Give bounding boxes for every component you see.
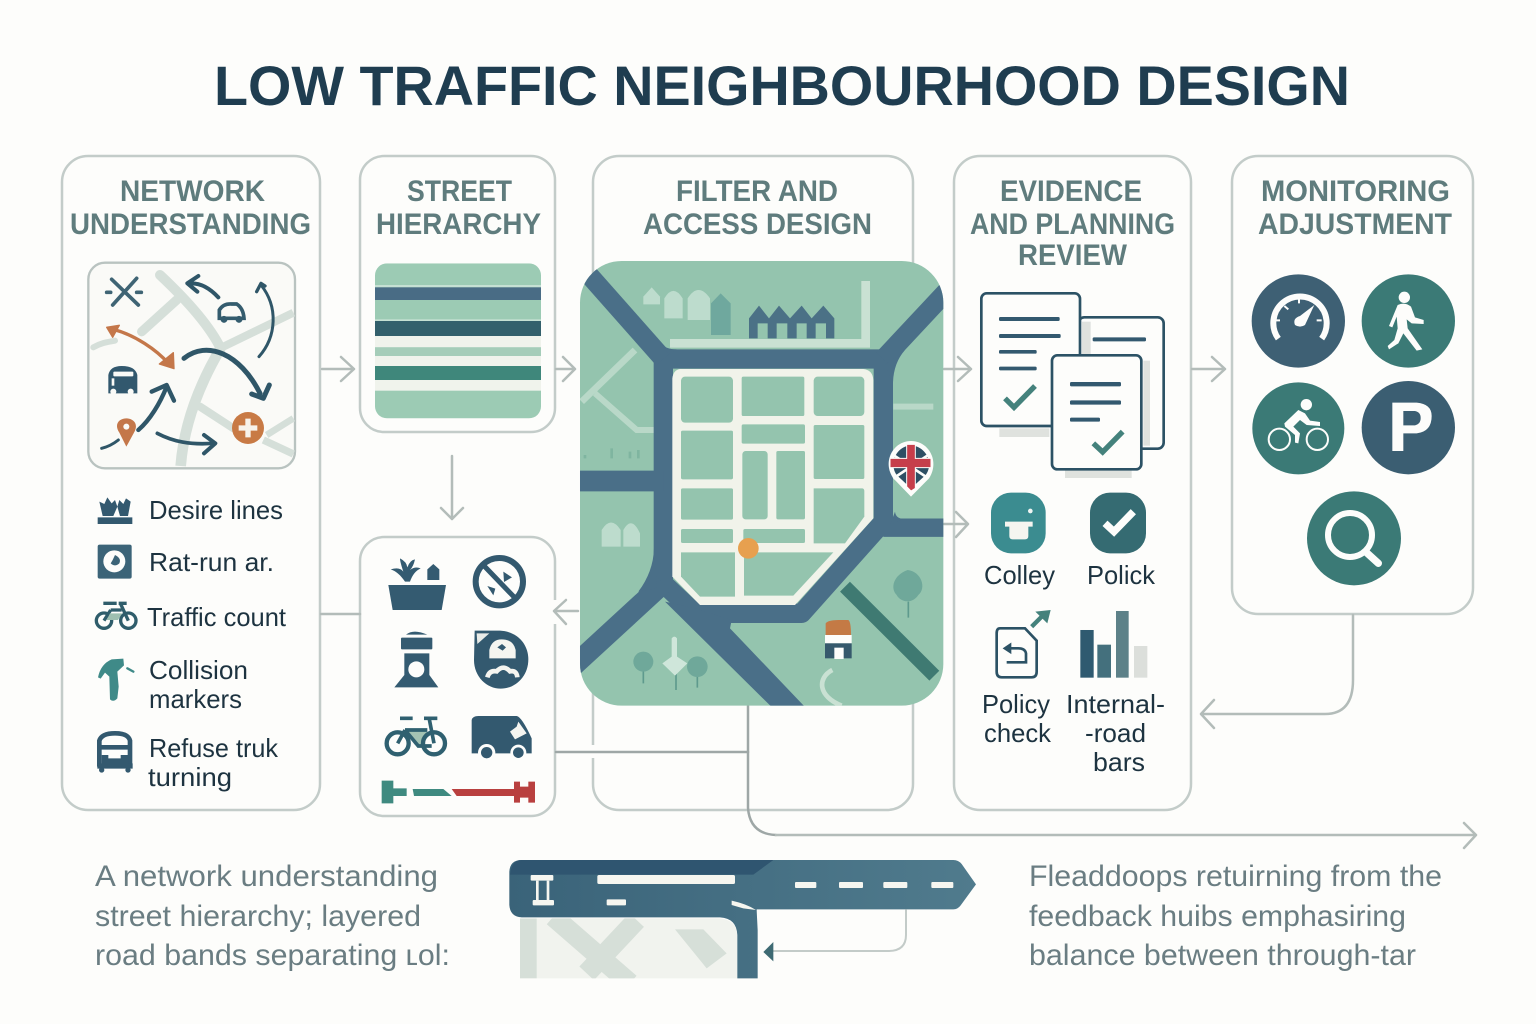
title: LOW TRAFFIC NEIGHBOURHOOD DESIGN	[214, 54, 1350, 117]
icon: car top	[219, 304, 244, 321]
heading: street hierarchy: HIERARCHY	[376, 208, 541, 241]
icon: orange plus	[232, 412, 264, 444]
heading: street hierarchy: STREET	[407, 175, 512, 208]
icon: document stack	[981, 293, 1164, 478]
heading: filter and access design: FILTER AND	[676, 175, 838, 208]
icon: collision marker	[98, 659, 133, 701]
icon: bike	[96, 603, 136, 628]
icon: pedestrian	[1362, 274, 1455, 368]
arrows and markers	[102, 276, 273, 453]
icon: policy tick	[1090, 493, 1146, 553]
legend labels: Rat-run ar.	[149, 547, 274, 577]
panel: filter and access design	[588, 156, 913, 810]
heading: monitoring adjustment: ADJUSTMENT	[1258, 208, 1452, 241]
inset street map	[520, 917, 737, 983]
icon: blocked crossing	[107, 278, 141, 305]
heading: network understanding: NETWORK	[120, 175, 265, 208]
heading: filter and access design	[643, 175, 872, 241]
legend labels	[147, 495, 287, 792]
icon: bicycle	[387, 718, 445, 754]
icon: bollard	[394, 632, 438, 687]
icon: location pin	[117, 418, 136, 447]
icon: rat-run	[98, 545, 132, 579]
heading: evidence and planning review	[970, 175, 1175, 272]
legend labels: Collision	[149, 655, 248, 685]
legend labels: Refuse truk	[149, 733, 279, 763]
legend labels: markers	[149, 684, 242, 714]
width restriction bar	[382, 781, 535, 803]
evidence labels: Internal-	[1066, 689, 1165, 719]
icon: magnifier	[1307, 491, 1401, 585]
heading: evidence and planning review: AND PLANNING	[970, 208, 1175, 241]
icon: planter	[388, 558, 446, 610]
panel: monitoring adjustment	[1232, 156, 1473, 614]
heading: evidence and planning review: EVIDENCE	[1000, 175, 1142, 208]
panel: filter toolkit	[360, 537, 560, 816]
map: teal side road	[845, 587, 934, 676]
icon: delivery van	[472, 716, 532, 761]
panel: evidence and planning review	[954, 156, 1191, 810]
legend labels: Desire lines	[149, 495, 283, 525]
panel: network understanding	[62, 156, 320, 810]
evidence labels: bars	[1093, 747, 1145, 777]
road hierarchy bands	[375, 263, 541, 418]
heading: evidence and planning review: REVIEW	[1018, 239, 1128, 272]
road diagram: bottom centre	[509, 860, 976, 983]
icon: parking	[1362, 381, 1455, 474]
evidence labels: check	[984, 718, 1052, 748]
legend labels: turning	[148, 762, 232, 792]
legend labels: Traffic count	[147, 602, 287, 632]
icon: policy check document	[997, 610, 1051, 677]
evidence labels: Policy	[982, 689, 1050, 719]
icon: internal-road bars	[1080, 611, 1147, 678]
icon: cyclist	[1252, 382, 1344, 474]
map: filter and access design	[568, 261, 950, 707]
legend list	[96, 497, 136, 773]
map pin: union flag shield	[889, 441, 933, 497]
caption: right: Fleaddoops retuirning from the	[1029, 860, 1442, 893]
heading: monitoring adjustment: MONITORING	[1261, 175, 1450, 208]
map: pale lanes	[582, 281, 933, 706]
evidence labels: -road	[1085, 718, 1146, 748]
heading: network understanding: UNDERSTANDING	[70, 208, 311, 241]
map: main road network	[568, 267, 950, 707]
icon: no-entry sign	[476, 558, 523, 605]
caption: right: balance between through-tar	[1029, 939, 1416, 972]
icon: bus	[108, 366, 137, 395]
icon: camera badge	[474, 631, 528, 689]
heading: filter and access design: ACCESS DESIGN	[643, 208, 872, 241]
map: trees	[633, 570, 922, 690]
icon: colley bowl	[991, 493, 1046, 553]
icon: refuse truck	[97, 733, 133, 773]
caption: left: street hierarchy; layered	[95, 900, 421, 933]
evidence labels	[982, 560, 1165, 777]
map: street grid	[672, 369, 873, 605]
network map inset	[88, 263, 295, 468]
heading: street hierarchy	[376, 175, 541, 241]
caption: left: road bands separating ʟol:	[95, 939, 450, 972]
panel: street hierarchy	[360, 156, 555, 432]
connector arrows	[321, 357, 1476, 848]
heading: monitoring adjustment	[1258, 175, 1452, 241]
heading: network understanding	[70, 175, 311, 241]
evidence labels: Colley	[984, 560, 1055, 590]
feedback arrow	[763, 909, 906, 961]
evidence labels: Polick	[1087, 560, 1156, 590]
caption: left: A network understanding	[95, 860, 438, 893]
caption: right: feedback huibs emphasiring	[1029, 900, 1406, 933]
map: houses	[585, 287, 834, 547]
map: resident figure	[825, 620, 852, 659]
icon: speedometer	[1252, 274, 1345, 368]
icon: desire lines	[98, 497, 132, 524]
